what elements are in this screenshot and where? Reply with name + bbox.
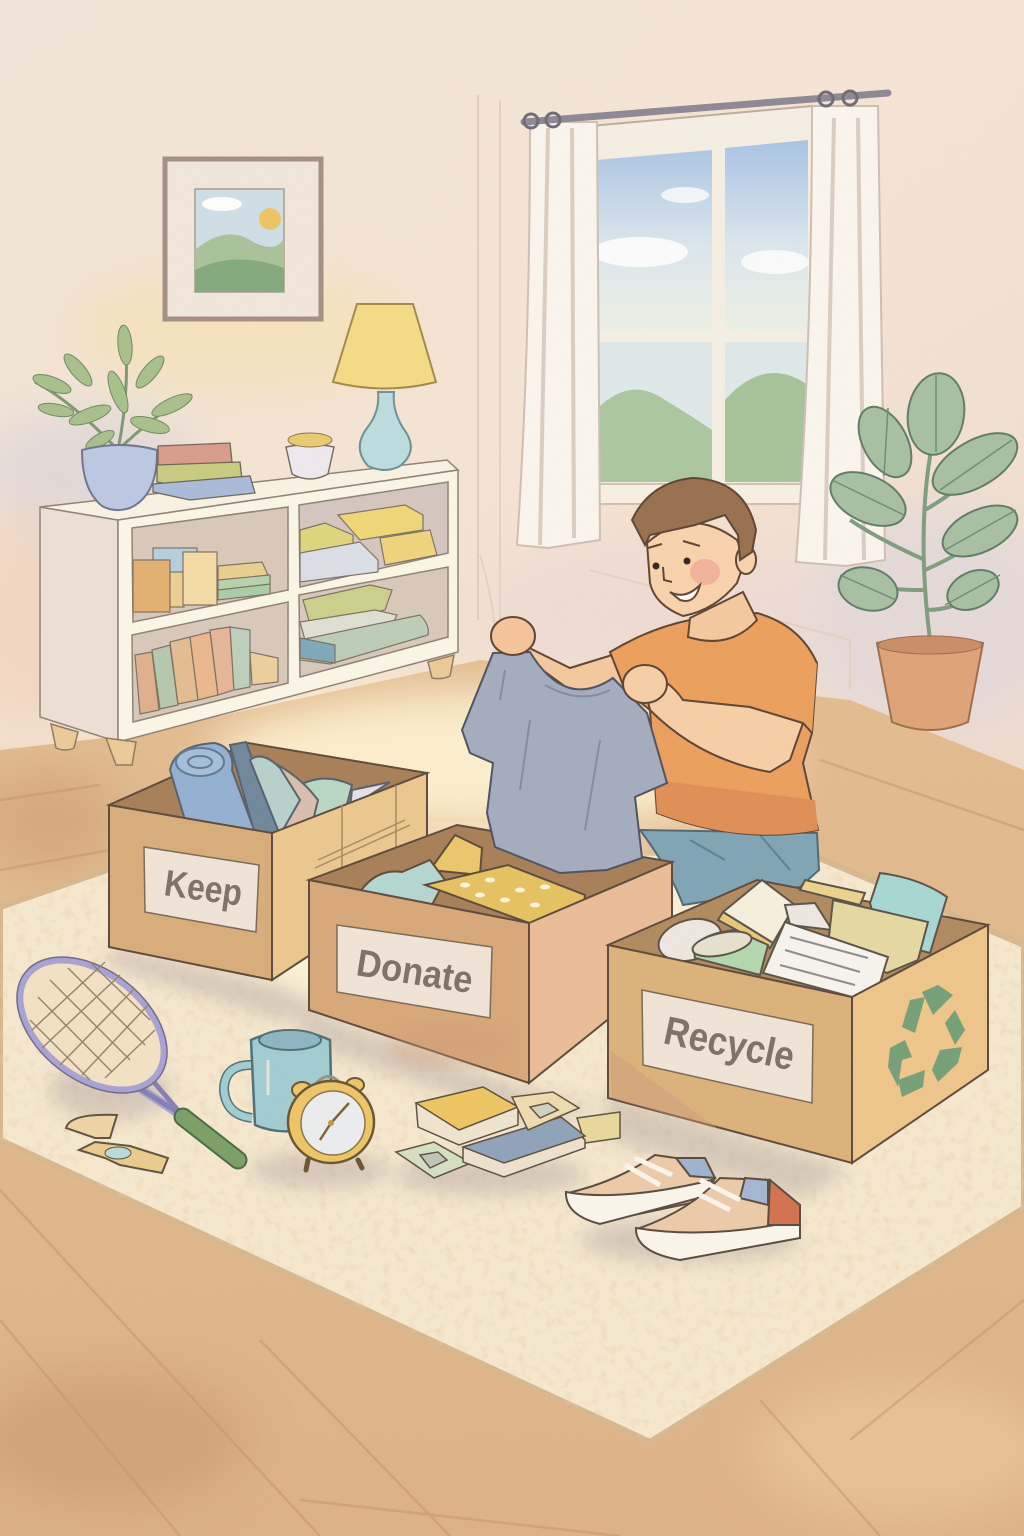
head (647, 523, 745, 616)
curtain rod (524, 91, 888, 128)
legs (640, 830, 819, 905)
window (580, 106, 820, 504)
potted plant: floor (822, 370, 1024, 730)
bookshelf (40, 460, 458, 765)
small tags (66, 1115, 168, 1173)
torso (610, 613, 818, 835)
box: Recycle (608, 873, 988, 1163)
cup (286, 433, 334, 479)
floor (0, 660, 1024, 1536)
sneakers (566, 1155, 800, 1260)
rug (0, 840, 1024, 1442)
box: Donate (309, 835, 672, 1083)
blue mug (224, 1030, 332, 1131)
box: Keep (109, 742, 427, 980)
box interior: Donate (309, 825, 672, 923)
label: Keep: Keep (162, 862, 245, 914)
contents: Keep (170, 742, 390, 845)
neck (688, 592, 757, 641)
curtain: left (517, 122, 600, 548)
potted plant: shelf (31, 324, 195, 510)
shadows on the rug (50, 945, 850, 1262)
label: Donate: Donate (354, 942, 476, 1002)
contents: Recycle (654, 873, 947, 997)
contents: Donate (358, 835, 585, 923)
alarm clock (288, 1076, 374, 1170)
icon: recycling symbol (888, 985, 965, 1097)
arm and hands (491, 617, 817, 772)
label: Keep (144, 847, 259, 932)
interior: Recycle (608, 880, 988, 997)
pile of books and photos (396, 1087, 620, 1178)
lamp (333, 304, 436, 470)
label: Recycle: Recycle (660, 1009, 798, 1079)
hair (632, 478, 756, 560)
label: Donate (337, 925, 492, 1018)
tennis racket (0, 929, 238, 1160)
interior: Keep (109, 743, 427, 833)
framed picture (165, 159, 321, 319)
wall (0, 0, 1024, 800)
label: Recycle (642, 990, 813, 1103)
grey t-shirt (462, 652, 667, 873)
stacked books on shelf (153, 443, 255, 500)
curtain: right (796, 106, 885, 566)
person (513, 478, 818, 835)
back arm (513, 640, 625, 690)
shelf items (133, 505, 437, 714)
